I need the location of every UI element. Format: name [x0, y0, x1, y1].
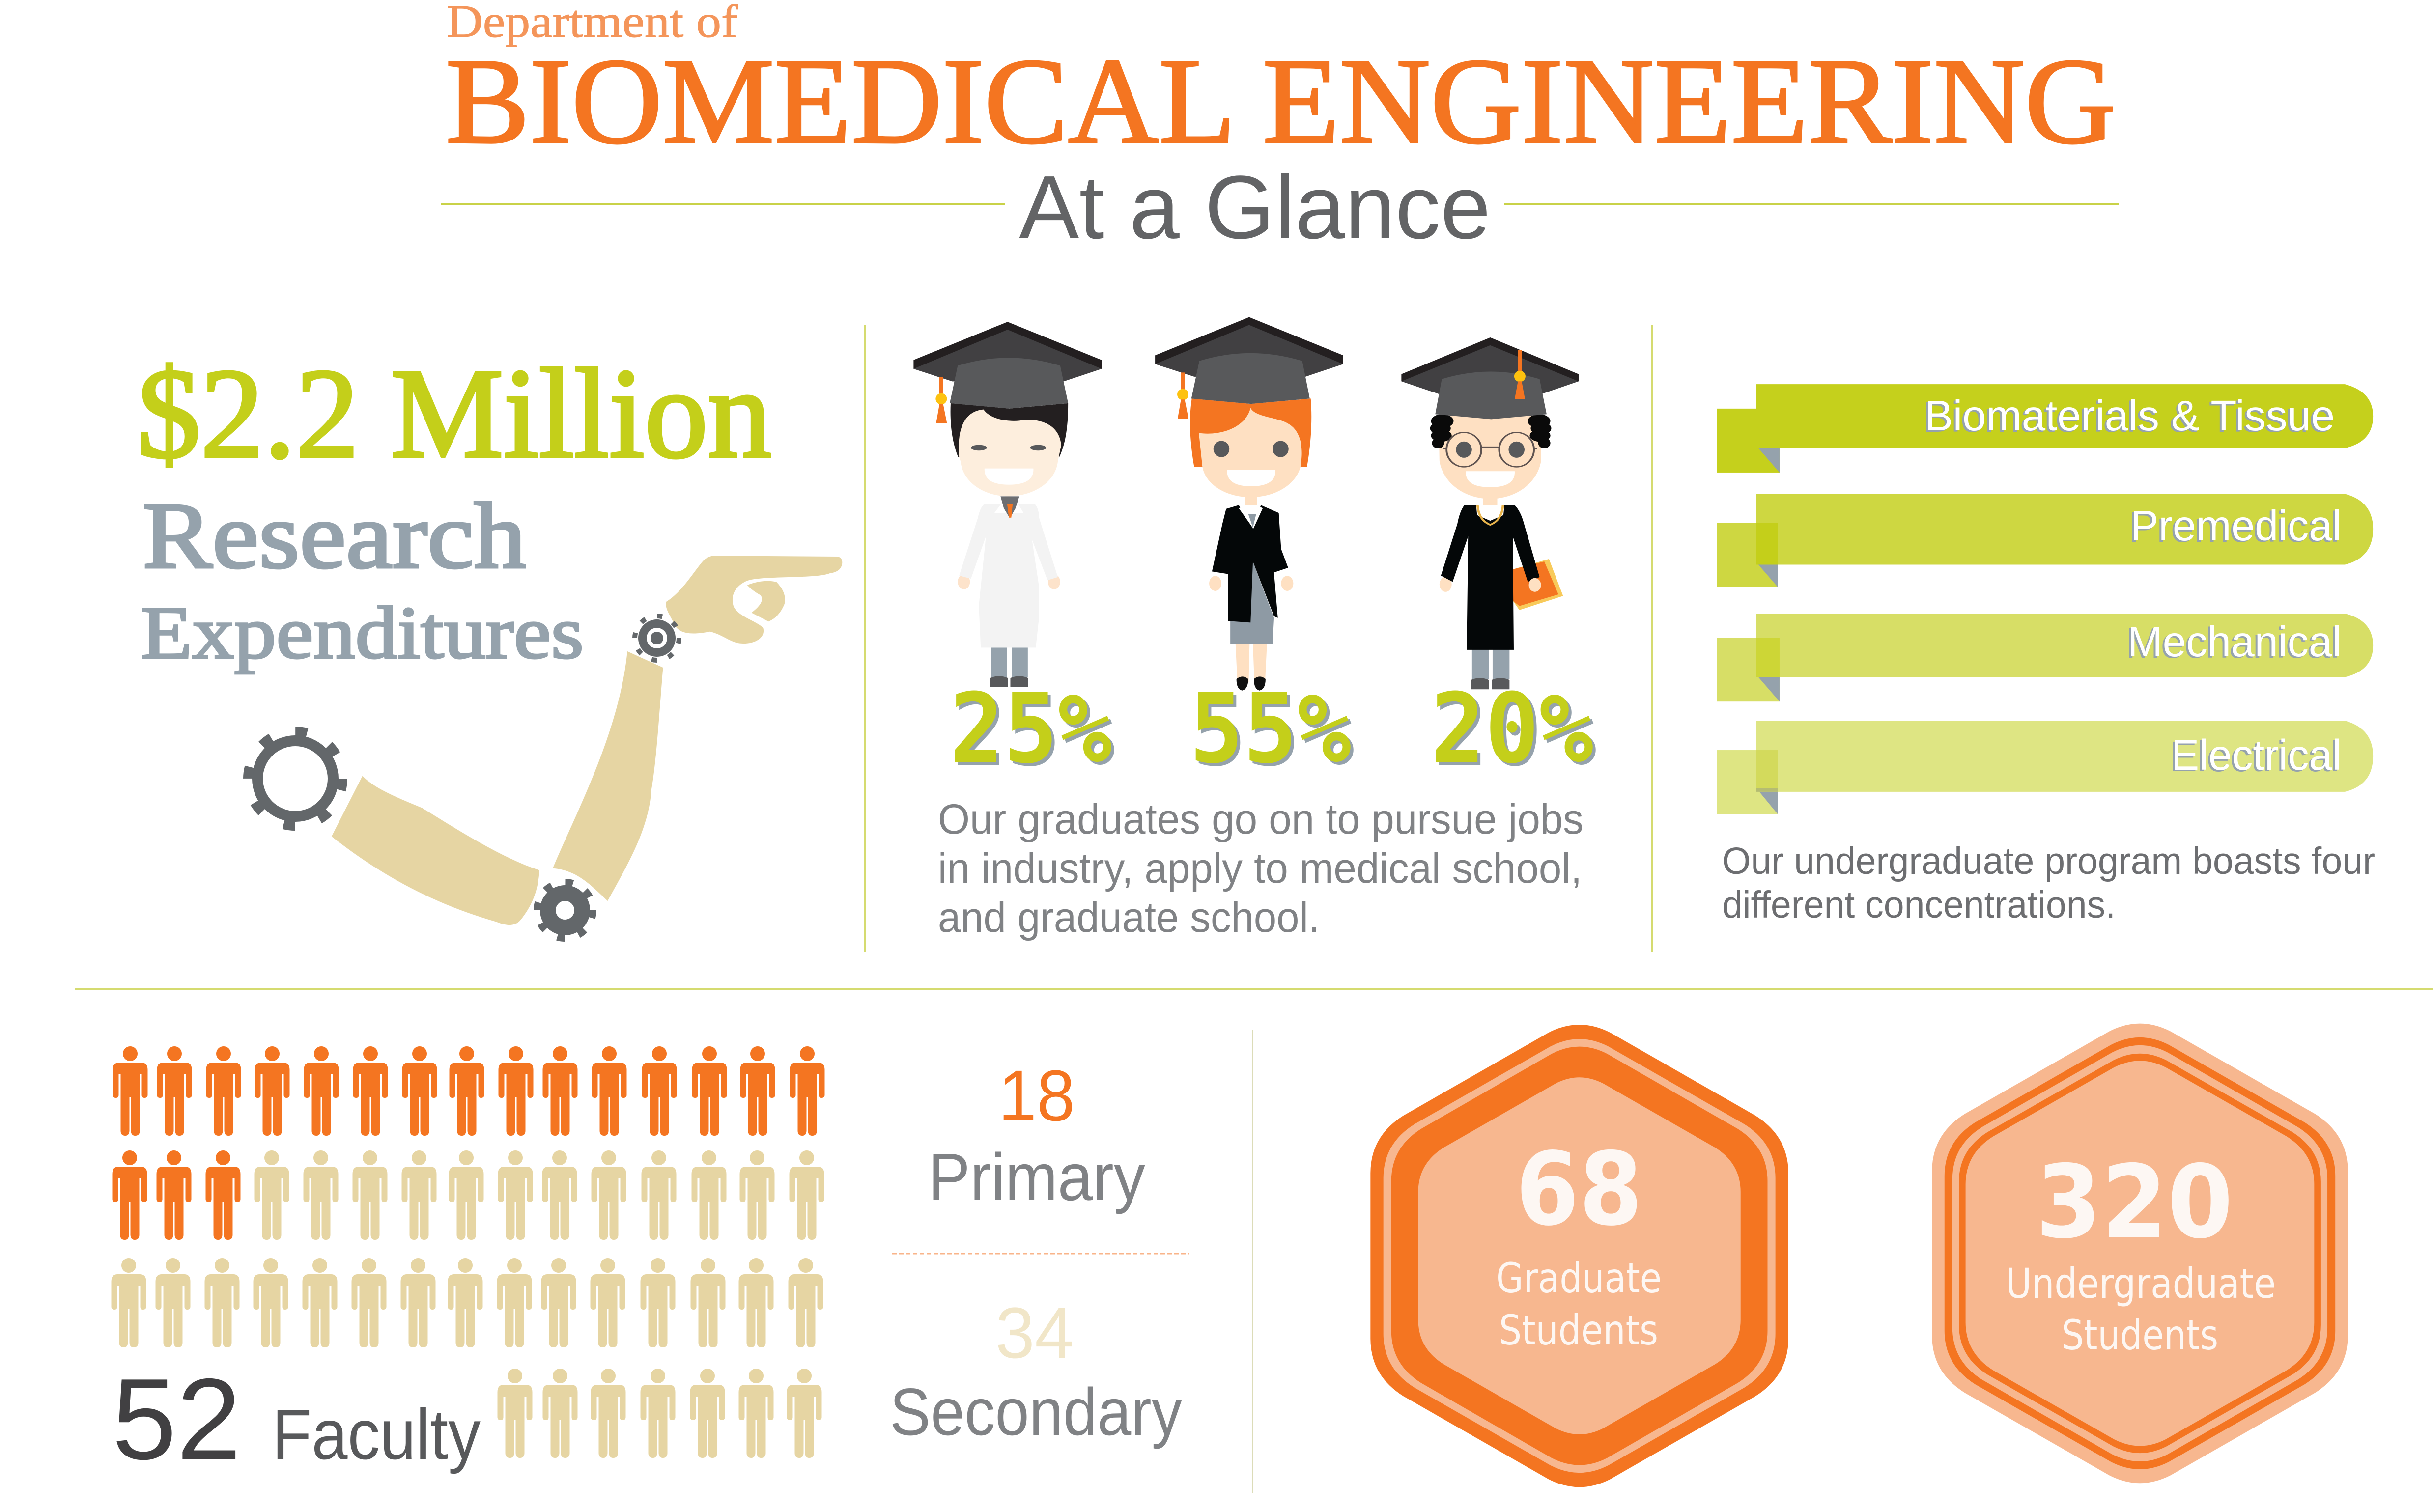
ribbon: Premedical: Premedical [2128, 504, 2340, 551]
icon: robotic arm [332, 556, 842, 925]
badge: graduate students [1370, 1025, 1788, 1487]
label: Faculty: Faculty [272, 1395, 481, 1474]
stat: 52: 52 [112, 1354, 241, 1484]
figure: graduate in lab coat [913, 322, 1102, 687]
stat: 55%: 55% [1192, 676, 1354, 788]
stat: 55%: 55% [1189, 673, 1351, 785]
stat: 25%: 25% [953, 676, 1115, 788]
stat: 34: 34 [995, 1293, 1074, 1373]
text: graduates description: and graduate school. [938, 894, 1320, 941]
pictogram row 4: secondary faculty [497, 1369, 821, 1458]
ribbon: Biomaterials & Tissue: Biomaterials & Tissue [1924, 392, 2335, 440]
heading: Research: Research [142, 483, 526, 588]
figure: graduate in suit [1155, 317, 1343, 691]
label: Graduate Students: Students [1499, 1306, 1658, 1354]
label: Graduate Students [1496, 1254, 1662, 1354]
title: Biomedical Engineering: BIOMEDICAL ENGINEERING [446, 33, 2116, 169]
label: Undergraduate Students: Undergraduate [2006, 1260, 2276, 1308]
pictogram row 2: three primary, twelve secondary [112, 1150, 824, 1240]
stat: 68: 68 [1516, 1131, 1642, 1248]
text: graduates description [938, 796, 1584, 941]
panel: graduates outcomes [913, 317, 1596, 941]
text: concentrations description: Our undergraduate program boasts four [1722, 840, 2375, 882]
ribbon: Mechanical: Mechanical [2127, 618, 2342, 666]
figure: graduate in gown [1401, 337, 1579, 689]
label: Primary: Primary [928, 1140, 1145, 1214]
text: concentrations description: different concentrations. [1722, 884, 2116, 926]
ribbon: Electrical: Electrical [2171, 731, 2342, 779]
ribbon: Mechanical [1717, 614, 2373, 701]
panel: concentrations [1717, 384, 2375, 926]
stat: 25%: 25% [950, 673, 1112, 785]
icon: elbow gear [537, 882, 593, 938]
ribbon: Premedical [1717, 494, 2373, 587]
pictogram row 3: secondary faculty [111, 1258, 823, 1347]
panel: research expenditures [137, 342, 842, 938]
badge: undergraduate students [1932, 1024, 2348, 1483]
label: Secondary: Secondary [890, 1374, 1182, 1449]
hexagon frame [1370, 1025, 1788, 1487]
heading: Expenditures: Expenditures [141, 591, 584, 674]
label: Undergraduate Students: Students [2062, 1311, 2218, 1359]
hexagon frame [1932, 1024, 2348, 1483]
icon: large gear [248, 731, 342, 826]
stat: 20%: 20% [1434, 676, 1596, 788]
icon: wrist gear [635, 616, 679, 660]
title block [446, 0, 2116, 257]
ribbon: Premedical: Premedical [2130, 502, 2342, 550]
ribbon: Electrical: Electrical [2169, 733, 2340, 781]
subtitle: At a Glance: At a Glance [1019, 157, 1491, 257]
text: graduates description: Our graduates go on to pursue jobs [938, 796, 1584, 843]
stat: 18: 18 [998, 1056, 1075, 1136]
panel: faculty [111, 1046, 1189, 1484]
ribbon: Mechanical: Mechanical [2125, 619, 2340, 667]
stat: 20%: 20% [1431, 673, 1593, 785]
text: concentrations description [1722, 840, 2375, 926]
pictogram row 1: primary faculty [113, 1046, 824, 1136]
ribbon: Electrical [1717, 721, 2373, 814]
stat: 320: 320 [2036, 1144, 2233, 1261]
ribbon: Biomaterials & Tissue: Biomaterials & Tissue [1923, 393, 2333, 441]
label: Undergraduate Students [2006, 1260, 2276, 1359]
ribbon: Biomaterials & Tissue [1717, 384, 2373, 473]
heading: $2.2 Million: $2.2 Million [137, 342, 771, 485]
label: Graduate Students: Graduate [1496, 1254, 1662, 1302]
text: graduates description: in industry, apply to medical school, [938, 845, 1582, 892]
